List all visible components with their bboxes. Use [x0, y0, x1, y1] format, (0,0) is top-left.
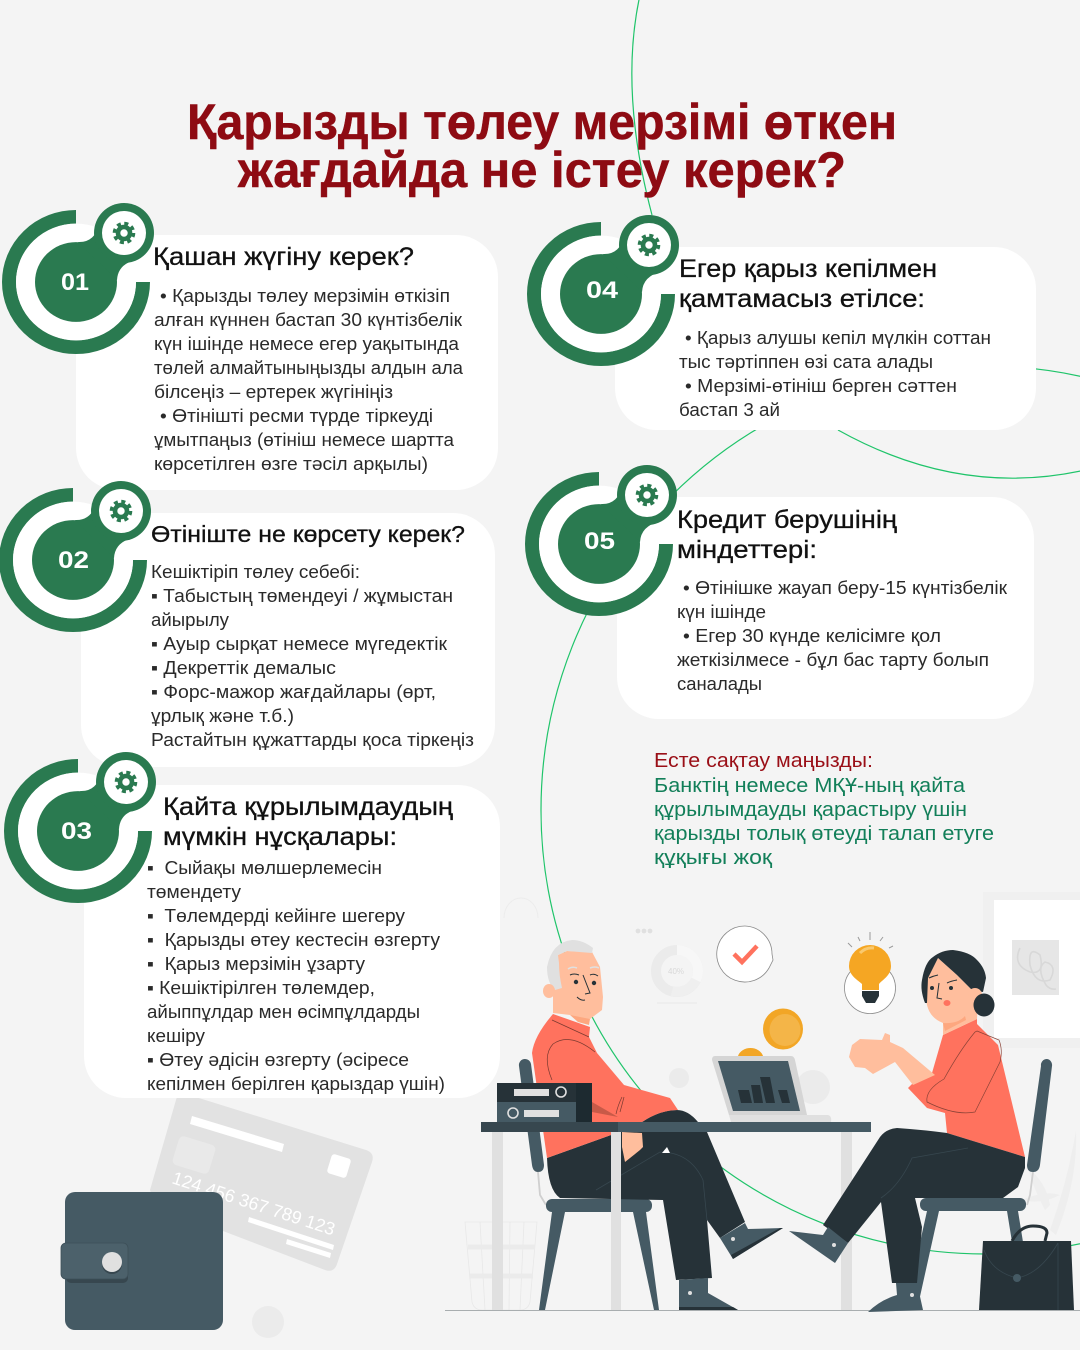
body text: Растайтын құжаттарды қоса тіркеңіз: [151, 730, 474, 750]
body text: саналады: [677, 674, 762, 694]
body text: [679, 328, 991, 420]
foot right: [720, 1223, 783, 1259]
note: important to remember: [654, 750, 994, 869]
panel 5: creditor duties: [532, 465, 1034, 719]
hair: [547, 940, 593, 990]
title: [187, 94, 897, 198]
badge 03: [11, 752, 156, 896]
heading: Егер қарыз кепілмен: [679, 255, 937, 283]
body text: алған күннен бастап 30 күнтізбелік: [154, 310, 462, 330]
ear: [968, 988, 982, 1002]
heading: Қашан жүгіну керек?: [153, 243, 414, 271]
heading: [677, 506, 897, 564]
body text: ▪ Қарыз мерзімін ұзарту: [147, 954, 365, 974]
panel 1: when to apply: [9, 203, 498, 490]
body text: айыппұлдар мен өсімпұлдарды: [147, 1002, 420, 1022]
panel 3: restructuring options: [11, 752, 500, 1098]
man's hand: [622, 1132, 643, 1162]
body text: Кешіктіріп төлеу себебі:: [151, 562, 360, 582]
floor line: [445, 1310, 1080, 1312]
body text: ▪ Кешіктірілген төлемдер,: [147, 978, 375, 998]
body text: күн ішінде немесе егер уақытында: [154, 334, 460, 354]
body text: ▪ Табыстың төмендеуі / жұмыстан: [151, 586, 453, 606]
body text: төмендету: [147, 882, 241, 902]
hands: [849, 1033, 935, 1085]
heading: міндеттері:: [677, 536, 817, 564]
man: [532, 940, 783, 1310]
background donut chart: 40%: [668, 967, 684, 976]
heading: [679, 255, 937, 313]
badge 05: [532, 465, 677, 609]
body text: жеткізілмесе - бұл бас тарту болып: [677, 650, 989, 670]
body text: • Мерзімі-өтініш берген сәттен: [685, 376, 957, 396]
faint background shapes: [504, 898, 830, 1104]
facial features: [929, 975, 957, 1006]
decorative grey circle: [252, 1306, 284, 1338]
laptop: [712, 1056, 831, 1122]
handbag: [979, 1226, 1074, 1310]
badge 02: [6, 481, 151, 625]
body text: айырылу: [151, 610, 229, 630]
body text: • Қарызды төлеу мерзімін өткізіп: [160, 286, 450, 306]
woman's chair: [905, 1059, 1052, 1310]
note: important to remember: қарызды толық өтеуді талап етуге: [654, 823, 994, 845]
body text: [677, 578, 1007, 694]
hair bun: [974, 994, 994, 1016]
body text: ▪ Қарызды өтеу кестесін өзгерту: [147, 930, 440, 950]
foot left: [679, 1278, 738, 1310]
wallet icon: [61, 1192, 223, 1330]
man's chair: [519, 1059, 659, 1310]
hair: [921, 950, 986, 1003]
body text: ▪ Декреттік демалыс: [151, 658, 336, 678]
body text: білсеңіз – ертерек жүгініңіз: [154, 382, 393, 402]
heading: Қайта құрылымдаудың: [163, 793, 453, 821]
panel card: [617, 497, 1034, 719]
body text: тыс тәртіппен өзі сата алады: [679, 352, 933, 372]
foot: [789, 1227, 848, 1263]
badge 04: 04: [586, 277, 619, 304]
foot bottom: [868, 1283, 923, 1312]
heading: [163, 793, 453, 851]
body text: көрсетілген өзге тәсіл арқылы): [154, 454, 428, 474]
trousers: [547, 1110, 745, 1280]
panel card: [81, 513, 495, 767]
trousers: [823, 1128, 1025, 1283]
panel card: [615, 247, 1036, 430]
badge 03: 03: [61, 818, 92, 845]
neck and face: [925, 958, 978, 1035]
heading: Кредит берушінің: [677, 506, 897, 534]
coins: [738, 1008, 803, 1056]
thin green decorative arcs: [541, 0, 1080, 1254]
woman: [789, 950, 1025, 1312]
badge 05: 05: [584, 528, 615, 555]
ear: [543, 984, 555, 998]
body text: • Өтінішті ресми түрде тіркеуді: [160, 406, 433, 426]
panel 2: what to state in the application: [6, 481, 495, 767]
heading: қамтамасыз етілсе:: [679, 285, 925, 313]
faint plant: [1022, 1130, 1076, 1235]
shirt: [532, 1014, 678, 1158]
illustration: two people at a desk: [445, 892, 1080, 1312]
body text: ▪ Өтеу әдісін өзгерту (әсіресе: [147, 1050, 409, 1070]
body text: • Өтінішке жауап беру-15 күнтізбелік: [683, 578, 1007, 598]
body text: кешіру: [147, 1026, 205, 1046]
decorative credit card: 124 456 367 789 123: [170, 1168, 338, 1239]
shirt: [908, 1019, 1025, 1157]
body text: ▪ Сыйақы мөлшерлемесін: [147, 858, 382, 878]
body text: бастап 3 ай: [679, 400, 780, 420]
note: important to remember: құқығы жоқ: [654, 847, 772, 869]
wastebasket: [465, 1222, 537, 1310]
title: Қарызды төлеу мерзімі өткен: [187, 94, 897, 150]
note: important to remember: құрылымдауды қарастыру үшін: [654, 799, 967, 821]
right desk leg: [841, 1132, 852, 1310]
badge 04: [534, 215, 679, 359]
speech bubble: check: [717, 926, 773, 982]
body text: төлей алмайтыныңызды алдын ала: [154, 358, 464, 378]
body text: • Егер 30 күнде келісімге қол: [683, 626, 941, 646]
badge 01: 01: [61, 269, 89, 296]
body text: ұмытпаңыз (өтініш немесе шартта: [154, 430, 455, 450]
body text: ▪ Ауыр сырқат немесе мүгедектік: [151, 634, 447, 654]
binders: [497, 1083, 592, 1122]
body text: ▪ Форс-мажор жағдайлары (өрт,: [151, 682, 436, 702]
note: important to remember: Банктің немесе МҚҰ-ның қайта: [654, 775, 966, 797]
title: жағдайда не істеу керек?: [237, 142, 846, 198]
desk: [481, 1122, 871, 1310]
badge 01: [9, 203, 154, 347]
heading: Өтініште не көрсету керек?: [151, 521, 465, 547]
panel card: [76, 235, 498, 490]
facial features: [568, 967, 599, 1000]
body text: [151, 562, 474, 750]
neck and face: [553, 951, 603, 1021]
body text: күн ішінде: [677, 602, 766, 622]
panel card: [84, 785, 500, 1098]
body text: кепілмен берілген қарыздар үшін): [147, 1074, 445, 1094]
decorative credit card: [150, 1094, 373, 1271]
badge 02: 02: [58, 547, 89, 574]
panel 4: if the loan is secured by collateral: [534, 215, 1036, 430]
background donut chart: [636, 929, 698, 1003]
background picture frame: [983, 892, 1080, 1048]
body text: ұрлық және т.б.): [151, 706, 294, 726]
body text: ▪ Төлемдерді кейінге шегеру: [147, 906, 405, 926]
heading: мүмкін нұсқалары:: [163, 823, 397, 851]
body text: [154, 286, 464, 474]
speech bubble with light bulb: [844, 932, 896, 1014]
note: important to remember: Есте сақтау маңызды:: [654, 750, 873, 772]
body text: • Қарыз алушы кепіл мүлкін соттан: [685, 328, 991, 348]
body text: [147, 858, 445, 1094]
